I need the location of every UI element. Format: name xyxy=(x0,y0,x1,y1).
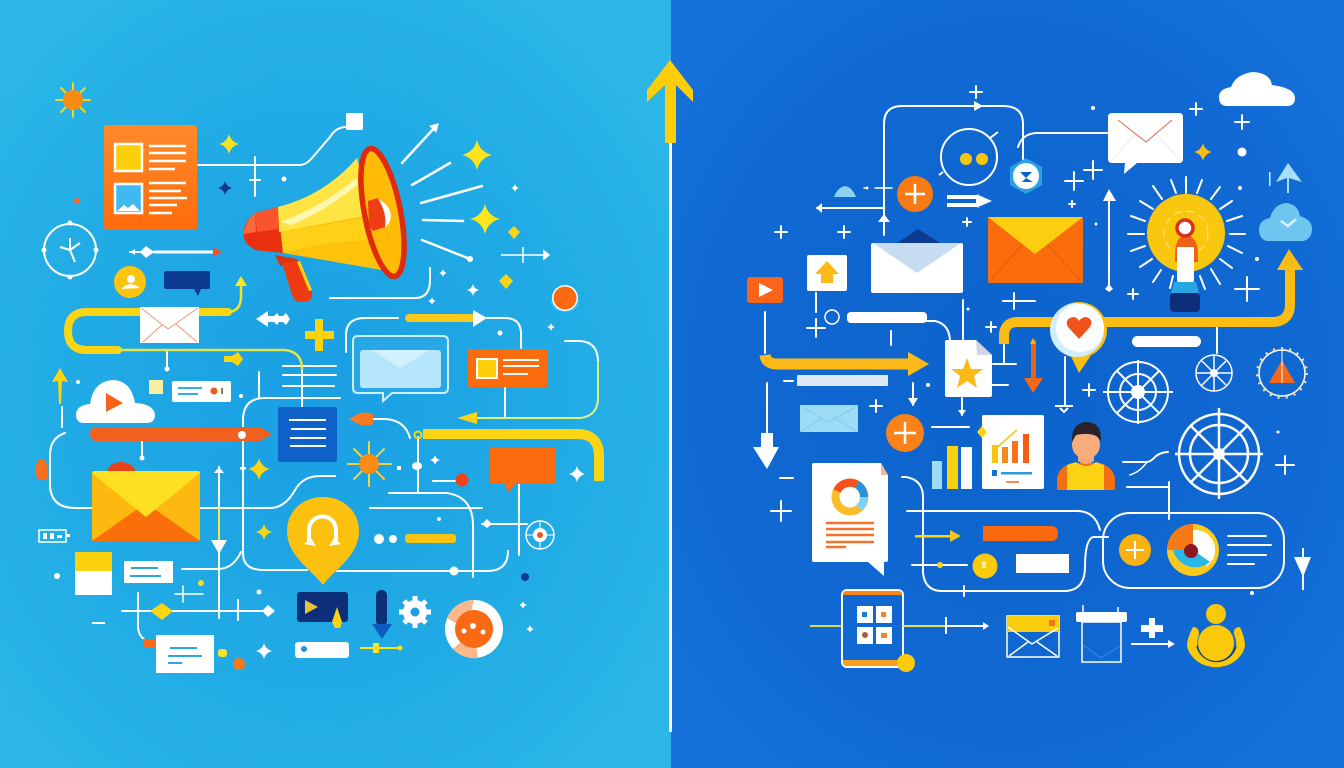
white rectangle xyxy=(1016,554,1069,573)
vertical double arrow xyxy=(1103,189,1116,292)
sparkles and dots right xyxy=(397,455,585,633)
dots and yellow pill xyxy=(374,534,456,544)
bottom envelope xyxy=(1007,616,1059,657)
big wheel xyxy=(1175,408,1263,499)
white card with lines xyxy=(124,561,173,583)
video play button xyxy=(747,277,783,303)
lightbulb icon xyxy=(1128,177,1245,312)
tablet with grid xyxy=(842,590,915,672)
panel: left background xyxy=(0,0,671,768)
blue document card xyxy=(278,407,337,462)
yellow envelope xyxy=(92,462,200,541)
white envelope large xyxy=(871,229,963,293)
person avatar xyxy=(1057,422,1115,490)
wheel one xyxy=(1103,360,1173,424)
white card with blue lines xyxy=(172,381,231,402)
orange tag on card xyxy=(143,639,164,648)
white pill xyxy=(1132,336,1201,347)
left panel connector lines xyxy=(50,127,598,640)
yellow up arrow xyxy=(52,368,68,404)
light blue hump xyxy=(834,186,856,197)
small footer dots xyxy=(218,643,272,670)
yellow sparkles center-left xyxy=(198,458,272,586)
yellow and white block xyxy=(75,552,112,595)
yellow sparkle top right xyxy=(1194,143,1212,161)
white node on arrow xyxy=(238,431,246,439)
orange down arrow xyxy=(1024,338,1043,393)
sparkles left top xyxy=(74,134,286,204)
bar chart xyxy=(932,446,972,489)
card with up arrow xyxy=(807,255,847,291)
small yellow arrow xyxy=(360,643,402,653)
light blue cloud with check xyxy=(1259,203,1312,241)
chart card xyxy=(982,415,1044,489)
arrow: double-ended white to orange xyxy=(130,246,222,258)
yellow plus xyxy=(305,319,334,351)
white square node xyxy=(346,113,363,130)
node on top path xyxy=(974,101,983,111)
orange arrow tag xyxy=(349,413,373,425)
white envelope on loop xyxy=(140,307,199,343)
cloud with play xyxy=(76,380,155,423)
panel: right background xyxy=(671,0,1344,768)
yellow arrow small xyxy=(915,530,961,542)
icon: gear xyxy=(399,596,431,628)
orange plus circle lower xyxy=(886,414,924,452)
small white node xyxy=(164,366,170,372)
yellow diamond arrow xyxy=(224,352,243,366)
center divider with upward arrow xyxy=(647,60,693,732)
yellow node and circle xyxy=(937,554,998,578)
sparkles and diamonds right of megaphone xyxy=(428,140,555,336)
document with star xyxy=(945,340,992,397)
donut button xyxy=(445,600,503,658)
report document with donut xyxy=(812,463,888,576)
arrow with cross tick xyxy=(501,247,549,263)
yellow arrow right xyxy=(765,352,929,376)
light up arrow xyxy=(1269,163,1302,193)
orange circle node xyxy=(551,285,579,312)
white double arrow xyxy=(256,311,290,327)
sparkle above path xyxy=(970,86,982,98)
yellow triangle arrow left xyxy=(457,412,477,424)
thin plus sparkles right xyxy=(771,103,1294,521)
yellow location pin xyxy=(287,497,359,585)
battery icon xyxy=(39,530,70,542)
orange card with yellow square xyxy=(468,349,548,387)
calendar icon xyxy=(1076,605,1127,662)
small white dots and bits xyxy=(54,380,262,624)
navy play card xyxy=(297,592,348,628)
light gray bar xyxy=(797,375,888,386)
tablet connectors xyxy=(810,617,989,634)
navy speech bubble xyxy=(164,271,210,296)
light blue envelope xyxy=(800,405,858,432)
yellow person icon xyxy=(1187,604,1245,667)
card: orange article xyxy=(104,125,197,230)
white diamond xyxy=(262,605,275,617)
plus with arrow xyxy=(1131,618,1175,648)
white down arrow large xyxy=(753,433,779,469)
orange tag xyxy=(35,460,47,479)
yellow bar with play arrow xyxy=(405,310,487,327)
arrow head left and drop xyxy=(816,186,890,235)
icon: target circle xyxy=(526,521,554,549)
compass wheel with triangle xyxy=(1258,349,1306,397)
yellow and green-tinted connector lines xyxy=(68,283,599,540)
pie gauge xyxy=(1167,524,1219,576)
orange plus circle top xyxy=(897,176,933,212)
icon: yellow person badge xyxy=(114,266,146,298)
top right white cloud xyxy=(1219,72,1295,106)
yellow arrow up xyxy=(235,276,247,286)
orange envelope xyxy=(988,217,1083,283)
circle chat icon with dots xyxy=(939,129,998,185)
white arrow right xyxy=(947,194,992,208)
down-pointing arrow right xyxy=(1294,548,1311,590)
orange pill bar xyxy=(983,526,1058,541)
white dots top right xyxy=(926,106,1280,595)
hexagon badge xyxy=(1010,158,1042,194)
white arrow tips on vertical line xyxy=(211,467,227,554)
megaphone xyxy=(243,145,413,302)
white pill and ring xyxy=(825,308,970,324)
white speech envelope xyxy=(1108,113,1183,174)
white note card xyxy=(156,635,214,673)
yellow arrow on horizontal line xyxy=(150,603,173,620)
orange speech box xyxy=(490,447,556,493)
yellow plus circle xyxy=(1119,534,1151,566)
wheel two xyxy=(1196,355,1232,391)
icon: sun top-left xyxy=(56,83,90,117)
heart pin xyxy=(1050,302,1107,373)
small white arrow heads xyxy=(908,398,966,416)
right panel connector lines xyxy=(765,106,1284,596)
icon: clock circle xyxy=(42,220,98,280)
megaphone sound rays xyxy=(402,124,482,262)
thick yellow arrow up-right xyxy=(1004,249,1303,344)
base tick xyxy=(1055,406,1073,412)
blue window speech bubble xyxy=(353,336,448,401)
orange long arrow bar xyxy=(90,427,272,441)
navy down arrow xyxy=(372,590,392,639)
yellow node on chart xyxy=(977,426,987,438)
small yellow card xyxy=(149,380,163,394)
icon: orange sun xyxy=(348,442,391,486)
small yellow ring xyxy=(414,432,422,438)
white pill with blue dot xyxy=(295,642,349,658)
